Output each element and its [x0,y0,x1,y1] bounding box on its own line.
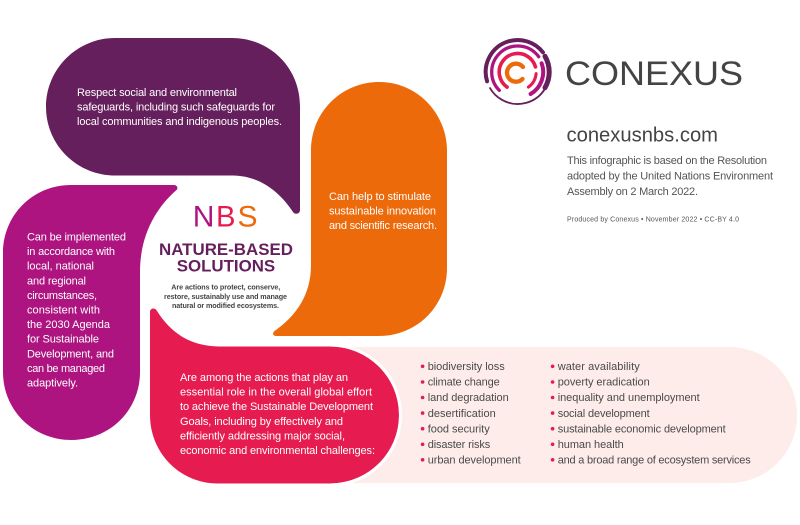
list: second column: poverty eradication [558,377,650,389]
heading: nature-based solutions [159,240,293,276]
heading: NBS [193,201,258,234]
text: essential role: to achieve the Sustainable Development [180,401,373,413]
list bullets [421,364,554,462]
text: safeguards: Respect social and environmental [77,87,237,99]
list: first column: food security [428,423,490,435]
definition text: restore, sustainably use and manage [164,292,287,301]
website link text: conexusnbs.com [566,124,718,146]
list: first column [428,361,521,466]
text: safeguards [77,87,282,128]
list: first column: urban development [428,454,521,466]
heading: NBS: S [238,201,258,234]
heading: NBS: B [216,201,236,234]
text: safeguards: safeguards, including such safeguards for [77,102,275,114]
panel: purple safeguards bubble [46,38,300,214]
text: implementation: local, national [27,261,94,273]
credit line: Produced by Conexus • November 2022 • CC-BY 4.0 [567,216,739,224]
source description: adopted by the United Nations Environment [567,170,773,182]
list: first column: disaster risks [428,439,491,451]
text: essential role: efficiently addressing major social, [180,430,345,442]
source description: This infographic is based on the Resolution [567,155,767,167]
text: essential role [180,372,375,457]
definition text [164,282,287,310]
heading: nature-based solutions: SOLUTIONS [177,257,275,276]
heading: nature-based solutions: NATURE-BASED [159,240,293,259]
text: implementation: and regional [27,275,86,287]
text: implementation: consistent with [27,304,100,316]
text: implementation: can be managed [27,363,105,375]
list: second column: human health [558,439,624,451]
text: innovation [329,191,437,232]
text: implementation: adaptively. [27,378,78,390]
source description: Assembly on 2 March 2022. [567,186,698,198]
list: second column: sustainable economic development [558,423,726,435]
text: essential role: economic and environmental challenges: [180,445,375,457]
panel: orange innovation bubble [273,82,447,336]
list: first column: biodiversity loss [428,361,505,373]
text: implementation [27,232,126,390]
definition text: Are actions to protect, conserve, [171,282,280,292]
text: implementation: circumstances, [27,290,97,302]
panel: pale pink challenges list [330,347,797,483]
text: safeguards: local communities and indigenous peoples. [77,116,282,128]
logo wordmark: CONEXUS: CONEXUS [565,55,743,93]
list: first column: desertification [428,408,496,420]
panel: magenta implementation bubble [3,185,177,440]
text: implementation: in accordance with [27,246,115,258]
list: second column: and a broad range of ecosystem services [558,454,751,466]
text: implementation: the 2030 Agenda [27,319,111,331]
heading: NBS: N [193,201,214,234]
text: implementation: Development, and [27,348,114,360]
text: implementation: Can be implemented [27,232,126,244]
source description [567,155,773,198]
icon: Conexus logo [474,28,561,116]
text: innovation: Can help to stimulate [329,191,431,203]
text: innovation: and scientific research. [329,220,437,232]
text: innovation: sustainable innovation [329,206,436,218]
list: first column: climate change [428,377,500,389]
list: second column [557,361,751,466]
list: second column: inequality and unemployment [558,392,700,404]
list: second column: water availability [557,361,640,373]
list: first column: land degradation [428,392,509,404]
text: essential role: Are among the actions that play an [180,372,348,384]
text: implementation: for Sustainable [27,334,99,346]
text: essential role: Goals, including by effectively and [180,416,343,428]
definition text: natural or modified ecosystems. [172,301,279,310]
panel: crimson role bubble [150,308,400,485]
text: essential role: essential role in the overall global effort [180,387,372,399]
list: second column: social development [558,408,650,420]
